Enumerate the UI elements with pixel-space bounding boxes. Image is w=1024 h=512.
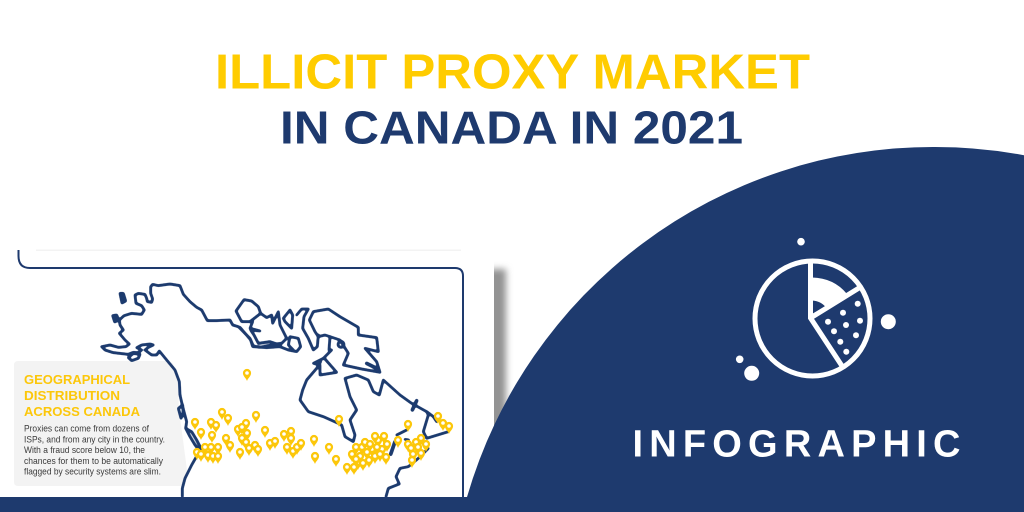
panel heading <box>24 372 141 419</box>
Arctic islands <box>236 300 380 375</box>
card shadow <box>486 269 506 512</box>
panel heading: ACROSS CANADA <box>24 404 141 419</box>
dots <box>825 301 863 355</box>
Hudson Bay and eastern coast <box>300 362 448 497</box>
panel body text: With a fraud score below 10, the <box>24 445 145 456</box>
panel heading: GEOGRAPHICAL <box>24 372 130 387</box>
pie outline <box>755 261 870 376</box>
title line 1: ILLICIT PROXY MARKET <box>215 44 810 100</box>
pie slice dividers <box>810 262 859 366</box>
panel body text: chances for them to be automatically <box>24 456 163 467</box>
panel body text: Proxies can come from dozens of <box>24 424 149 434</box>
text block: geographical distribution <box>24 372 165 478</box>
text box background <box>14 361 187 486</box>
map of Canada <box>102 284 448 497</box>
filled slice <box>812 278 847 315</box>
bottom bar <box>0 497 1024 512</box>
panel body text: flagged by security systems are slim. <box>24 466 161 478</box>
infographic label: INFOGRAPHIC <box>632 424 960 466</box>
panel body text: ISPs, and from any city in the country. <box>24 434 165 446</box>
west coast <box>178 395 201 497</box>
panel heading: DISTRIBUTION <box>24 388 120 403</box>
icon: pie chart <box>736 238 896 381</box>
title line 2: IN CANADA IN 2021 <box>280 102 743 154</box>
panel: map card <box>0 240 494 500</box>
map pins <box>191 369 453 475</box>
blue circle backdrop <box>467 147 1024 512</box>
floating bubbles <box>736 238 896 381</box>
western Canada and Alaska <box>102 284 280 395</box>
panel body text <box>24 424 165 478</box>
card frame <box>18 250 463 498</box>
title <box>215 44 810 154</box>
